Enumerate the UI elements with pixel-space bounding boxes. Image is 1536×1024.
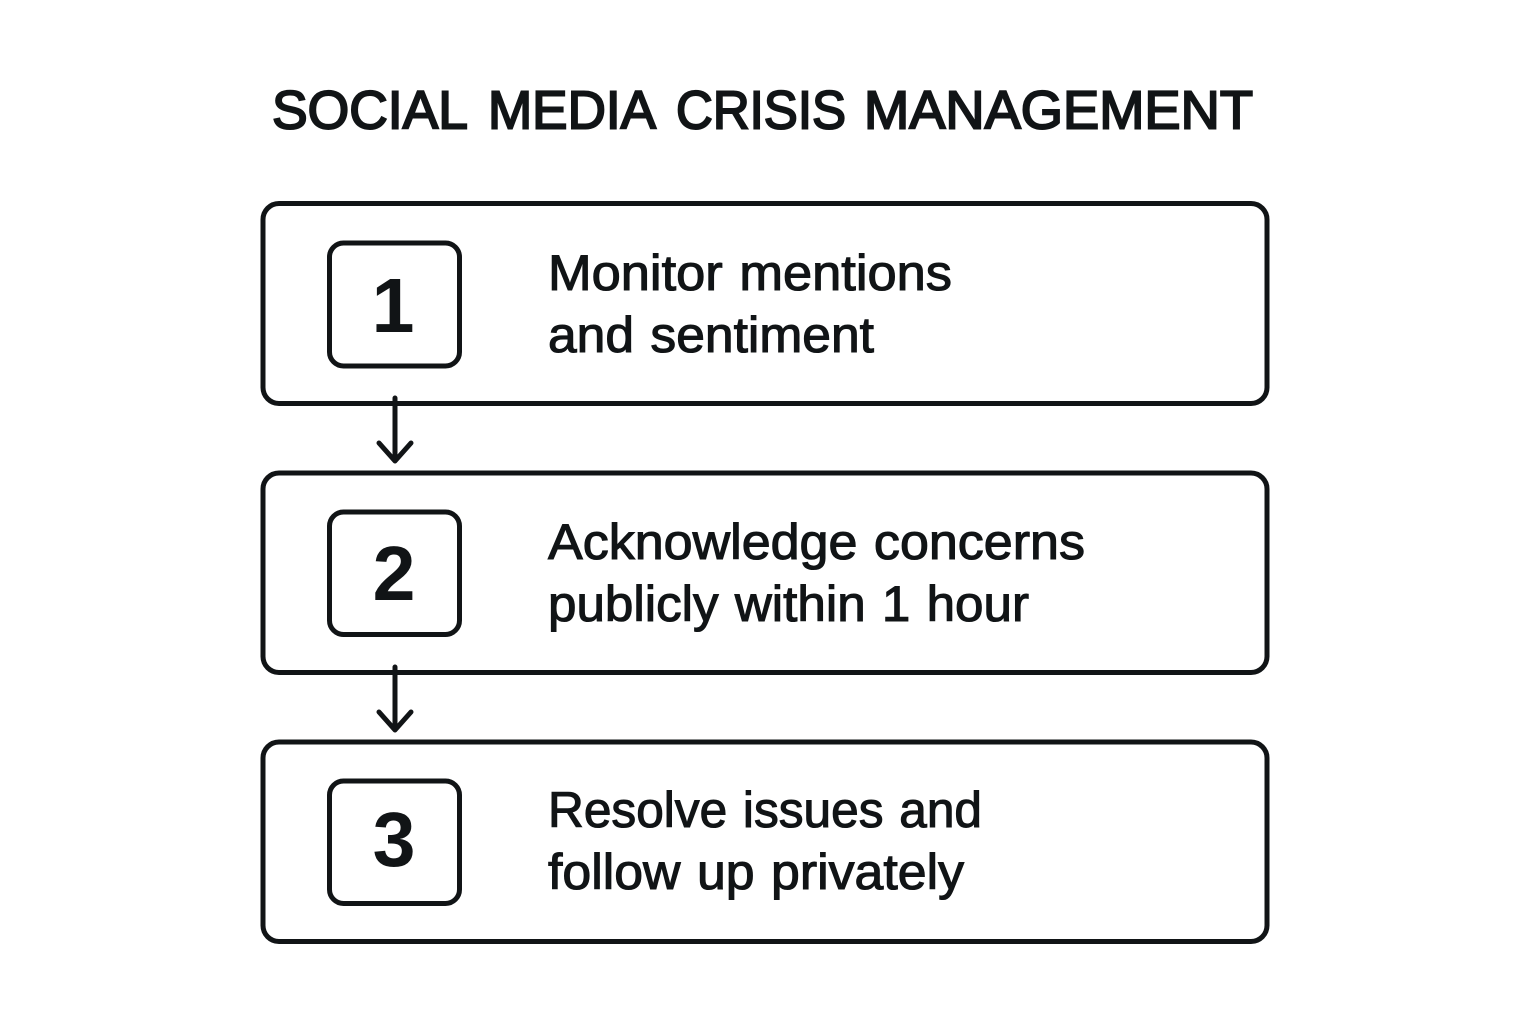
panel: step 3 [263,742,1267,942]
title [272,80,1253,140]
title: CRISIS [676,80,846,140]
arrow: step 2 to step 3 [379,667,411,730]
step 1 text: and sentiment [548,307,874,363]
step 1 outer box [263,204,1267,404]
title: MANAGEMENT [864,80,1253,140]
step 2 text [548,514,1085,632]
step 3 outer box [263,742,1267,942]
title: MEDIA [488,80,656,140]
step 1 number badge: 1 [372,263,414,349]
arrow: step 1 to step 2 [379,398,411,461]
step 2 outer box [263,473,1267,672]
step 1 text: Monitor mentions [548,245,952,301]
step 3 number badge: 3 [373,797,415,883]
step 3 number badge [330,781,460,904]
step 1 number badge [330,243,460,366]
step 2 number badge: 2 [373,531,415,617]
step 2 number badge [330,512,460,634]
step 3 text: Resolve issues and [548,782,982,838]
step 3 text: follow up privately [548,844,964,900]
title: SOCIAL [272,80,468,140]
panel: step 1 [263,204,1267,404]
step 1 text [548,245,952,363]
step 2 text: publicly within 1 hour [548,576,1029,632]
panel: step 2 [263,473,1267,672]
step 3 text [548,782,982,900]
step 2 text: Acknowledge concerns [548,514,1085,570]
